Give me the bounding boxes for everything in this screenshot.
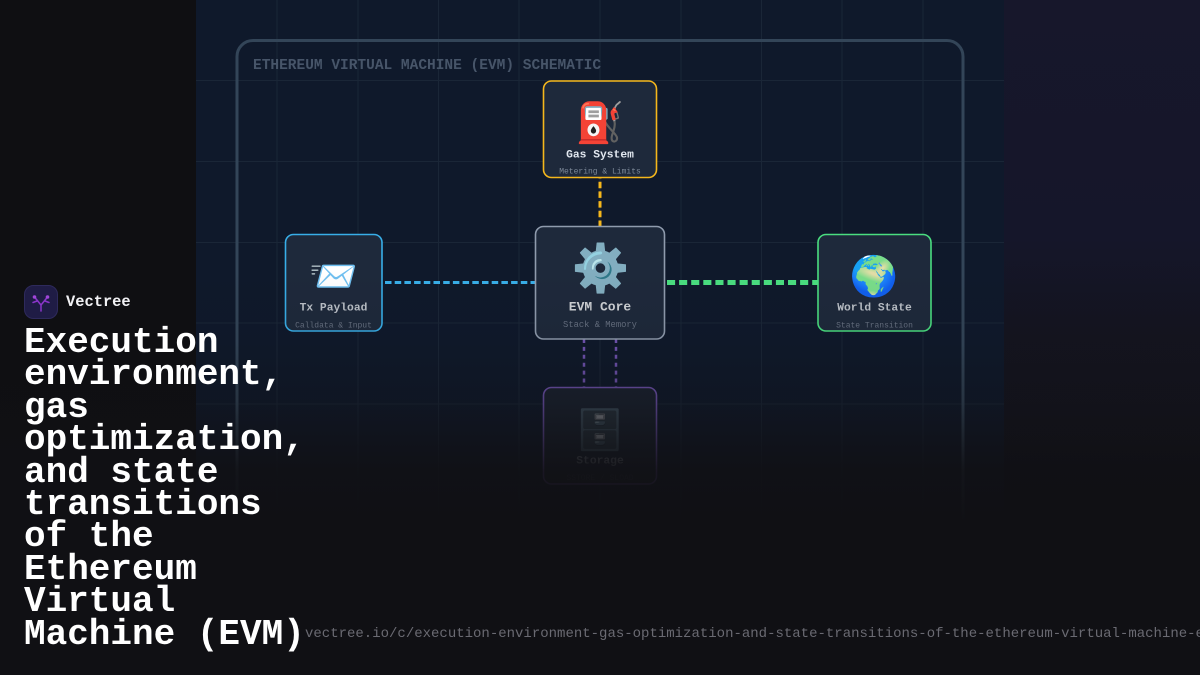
node: storage: Storage [576,456,624,468]
node: gas system: Metering & Limits [559,168,641,176]
node: world state: World State [837,302,912,314]
brand name: Vectree [66,292,131,310]
title [24,322,305,655]
title: transitions [24,484,262,525]
icon: vectree logo [24,285,58,319]
title: and state [24,452,218,493]
node: evm core: EVM Core [569,300,631,314]
node: tx payload: Calldata & Input [295,322,372,330]
node: world state [818,234,931,331]
node: world state: State Transition [836,322,913,330]
title: environment, [24,354,283,395]
node: world state: 🌍 [850,254,898,300]
left background panel [0,0,196,675]
title: Execution [24,322,218,363]
node: storage: 🗄️ [576,407,624,453]
right background panel [1004,0,1200,675]
schematic frame [237,40,963,640]
connector: payload to core [385,281,535,284]
node: tx payload [286,234,382,331]
title: of the [24,516,154,557]
node: evm core: Stack & Memory [563,320,637,330]
title: Virtual [24,581,175,622]
node: storage: SSTORE / SLOAD [566,474,634,483]
title: Machine (EVM) [24,614,305,655]
connector: gas to core [598,178,602,226]
title: Ethereum [24,549,197,590]
schematic heading: ETHEREUM VIRTUAL MACHINE (EVM) SCHEMATIC [253,58,601,74]
node: evm core [536,226,664,339]
connector: core to storage [584,339,616,387]
title: gas [24,387,89,428]
node: evm core: ⚙️ [572,241,629,296]
source url: vectree.io/c/execution-environment-gas-optimization-and-state-transitions-of-the-ethereum-virtual-machine-evm [305,626,1200,642]
node: tx payload: Tx Payload [300,302,367,314]
node: gas system: Gas System [566,150,634,162]
node: tx payload: 📨 [309,254,358,300]
title: optimization, [24,419,305,460]
node: gas system: ⛽ [576,100,624,146]
connector: core to world state [667,280,818,285]
node: storage [544,388,656,484]
brand row [24,285,131,319]
node: gas system [544,81,656,178]
